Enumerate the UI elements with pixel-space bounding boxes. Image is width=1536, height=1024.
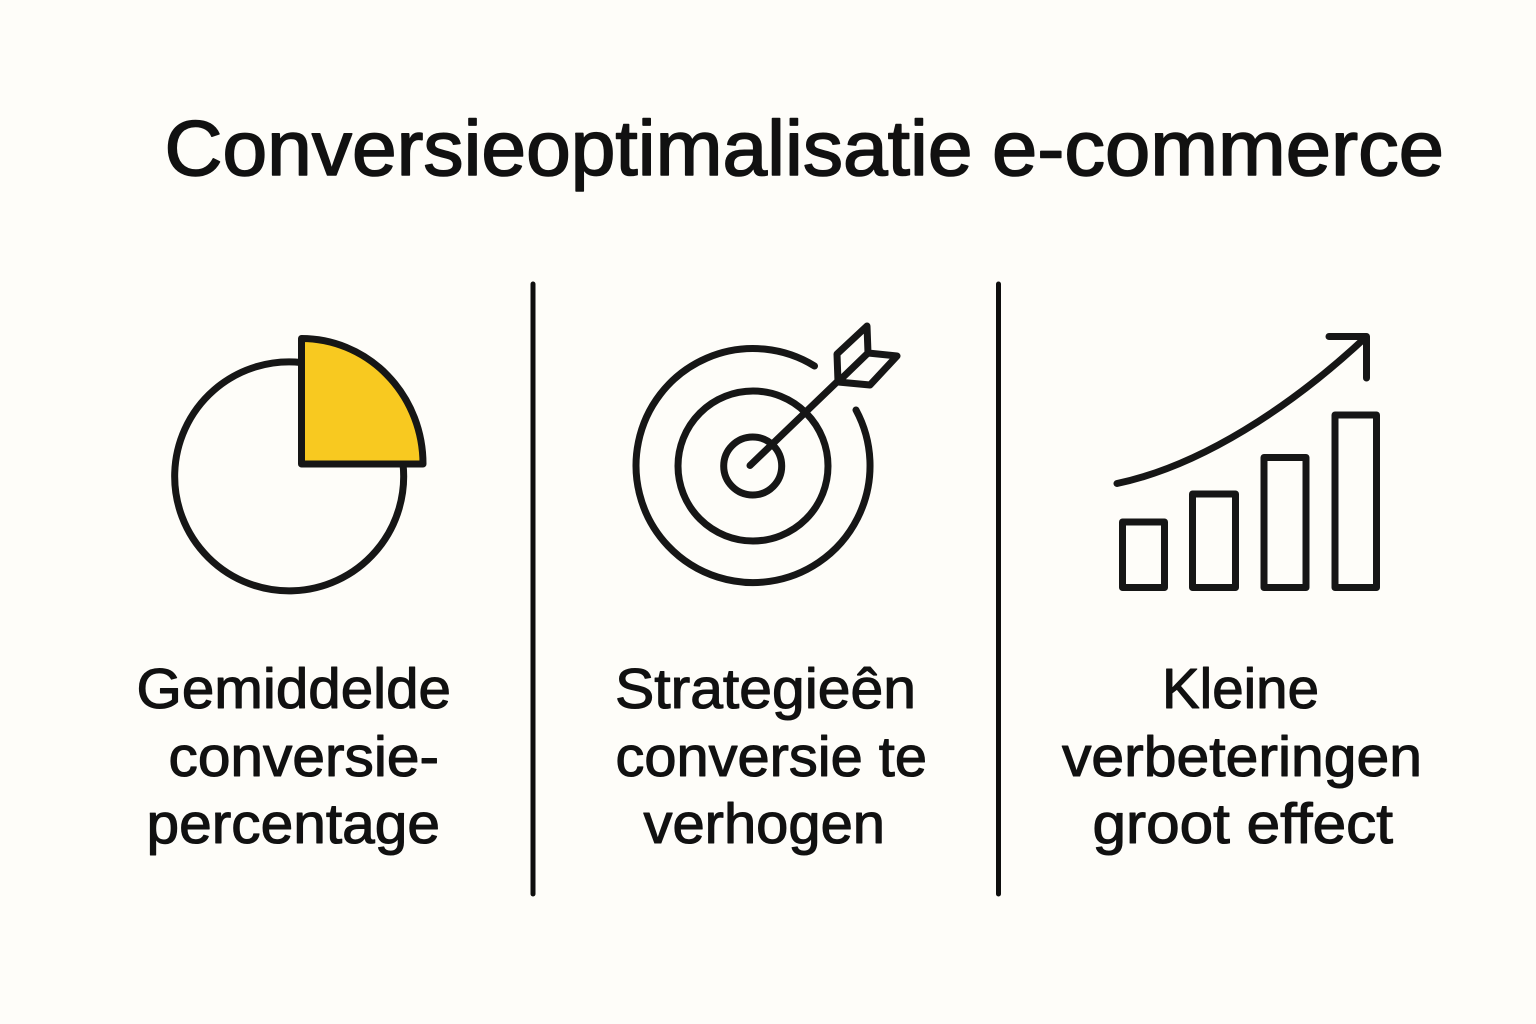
label: column 3	[1062, 657, 1422, 856]
title: e-commerce	[992, 104, 1444, 192]
arrow fletching	[837, 326, 897, 385]
icon: target with arrow	[636, 326, 897, 583]
label: column 2: verhogen	[644, 792, 885, 856]
label: column 1: percentage	[146, 792, 440, 856]
title	[164, 104, 1444, 192]
label: column 2	[615, 657, 927, 856]
title: Conversieoptimalisatie	[164, 104, 972, 192]
icon: rising bar chart	[1117, 336, 1376, 588]
label: column 3: verbeteringen	[1062, 725, 1422, 789]
label: column 3: Kleine	[1162, 657, 1319, 721]
label: column 2: conversie te	[616, 725, 927, 789]
icon: pie chart	[175, 338, 423, 591]
label: column 2: Strategieên	[615, 657, 916, 721]
growth arrow	[1117, 336, 1366, 484]
label: column 1: conversie-	[168, 725, 439, 789]
yellow pie slice	[302, 338, 423, 464]
label: column 1: Gemiddelde	[136, 657, 451, 721]
label: column 1	[136, 657, 451, 856]
label: column 3: groot effect	[1092, 792, 1393, 856]
